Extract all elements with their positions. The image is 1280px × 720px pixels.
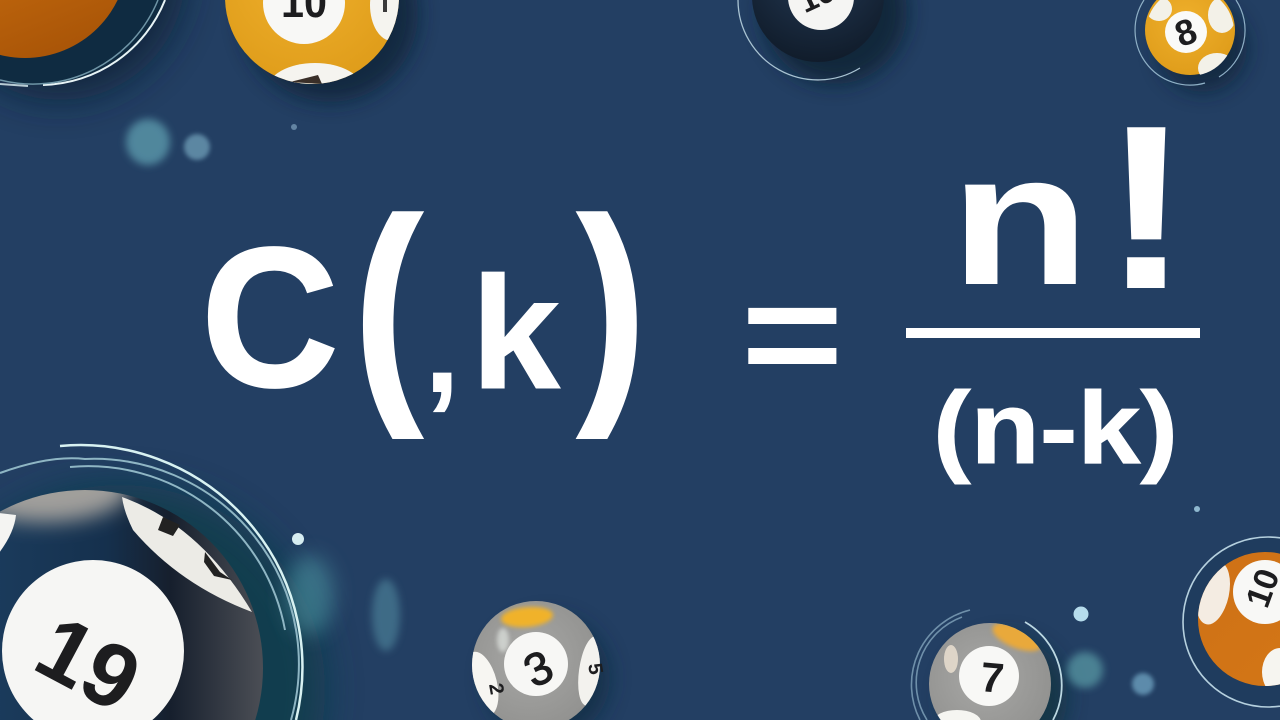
- rings around 19 ball: [0, 445, 302, 720]
- ball: top-left orange: [0, 0, 175, 86]
- ball: gray 3: 3: [516, 640, 561, 697]
- fraction bar: [906, 328, 1200, 338]
- formula: C(,k): (: [355, 171, 421, 438]
- ball: gray 7: [911, 610, 1062, 720]
- bokeh lights: [126, 119, 1200, 695]
- equals sign: =: [741, 252, 844, 417]
- formula: C(,k): ): [579, 171, 645, 438]
- ball: yellow 8: 8: [1169, 10, 1202, 55]
- formula: C(,k): C: [201, 207, 339, 429]
- ball: gray 7: 7: [979, 653, 1006, 702]
- fraction denominator: (n-k): (n-k): [933, 371, 1178, 485]
- ball: orange 10 rotated: [1183, 537, 1280, 707]
- fraction numerator: n!: [950, 77, 1191, 338]
- ball: gray 3: 5: [583, 662, 607, 676]
- ball: gray 3: [472, 601, 604, 720]
- ball: dark 10: [738, 0, 884, 80]
- ball: gray 3: 2: [484, 682, 508, 696]
- fraction numerator: n!: n: [950, 114, 1090, 324]
- formula: C(,k): k: [471, 243, 561, 422]
- formula: C(,k): [201, 171, 645, 438]
- formula: C(,k): ,: [424, 274, 460, 420]
- ball: large 19: [0, 490, 263, 720]
- ball: yellow 10: [225, 0, 399, 84]
- fraction numerator: n!: !: [1102, 77, 1191, 338]
- ball: yellow 8: [1135, 0, 1245, 85]
